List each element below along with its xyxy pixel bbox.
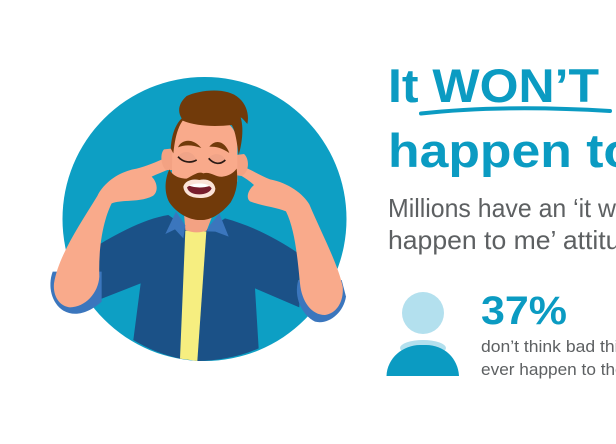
person body: [386, 345, 459, 376]
yellow t-shirt: [180, 231, 206, 361]
face: [172, 117, 237, 182]
person shoulders highlight: [400, 340, 446, 356]
statistic description: [481, 337, 616, 379]
title line 2: happen to: [388, 124, 616, 177]
title line 1: It WON’T: [388, 59, 599, 112]
teal background circle: [62, 77, 346, 361]
icon: person: [386, 292, 459, 376]
hair and sideburns: [171, 91, 248, 155]
beard: [166, 169, 237, 220]
jacket: [97, 215, 299, 361]
right sleeve cuff: [297, 280, 346, 322]
statistic: 37%: [481, 289, 567, 333]
mouth: [183, 180, 215, 198]
left arm and hand: [54, 157, 170, 307]
right arm and hand: [239, 167, 343, 315]
eyelashes: [178, 157, 225, 163]
illustration: man covering his ears: [50, 91, 346, 361]
title: [388, 59, 616, 177]
hand-drawn underline: [421, 108, 610, 114]
ears: [161, 148, 248, 176]
closed eyes: [178, 152, 225, 163]
left sleeve cuff: [50, 272, 102, 314]
shirt collar: [165, 212, 229, 238]
teeth: [189, 183, 210, 187]
eyebrows: [178, 141, 229, 153]
person head: [402, 292, 444, 334]
mouth interior: [187, 184, 212, 194]
neck: [184, 212, 214, 232]
subtitle: [388, 193, 616, 255]
